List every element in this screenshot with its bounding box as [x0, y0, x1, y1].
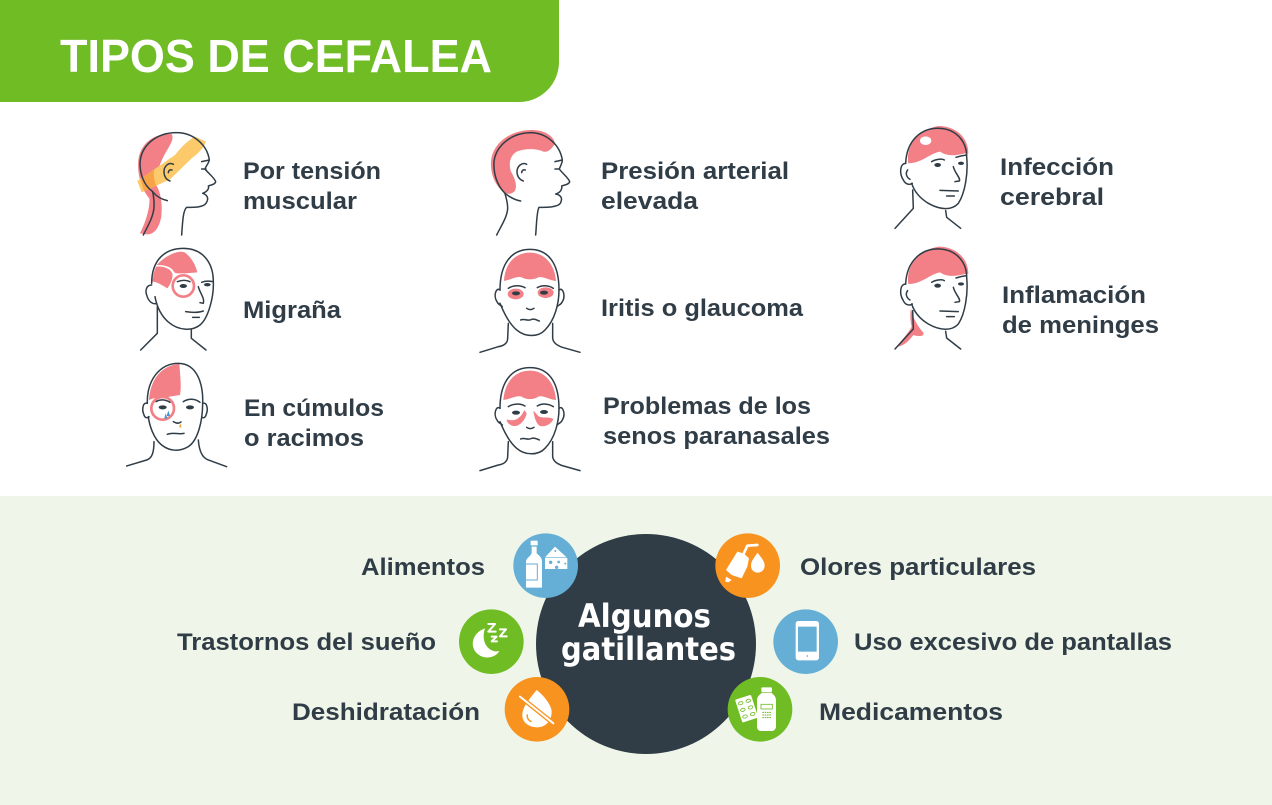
item: migraña — [141, 248, 342, 350]
central heading: Algunos — [578, 597, 711, 635]
label: senos paranasales — [603, 423, 830, 450]
icon: smartphone — [773, 609, 838, 674]
label: Inflamación — [1002, 282, 1146, 309]
icon: face with migraine area and eye ring — [141, 248, 213, 350]
label — [244, 395, 384, 452]
item: presión arterial elevada — [491, 130, 789, 235]
label: o racimos — [244, 425, 364, 452]
label: Migraña — [243, 297, 342, 324]
label: Problemas de los — [603, 393, 811, 420]
label: Por tensión — [243, 158, 381, 185]
icon: food and drink — [513, 533, 578, 598]
label: trastornos del sueño: Trastornos del sueño — [177, 629, 436, 656]
icon: face with eye pain — [480, 249, 580, 352]
label: olores particulares: Olores particulares — [800, 554, 1036, 581]
label — [243, 158, 381, 215]
panel: tipos de cefalea — [127, 126, 1159, 471]
label — [1002, 282, 1159, 339]
icon: face with cluster pain — [127, 363, 227, 467]
central heading — [561, 597, 736, 668]
label: deshidratación: Deshidratación — [292, 699, 480, 726]
label — [603, 393, 830, 450]
icon: head profile with crown pain — [491, 130, 570, 235]
label — [1000, 154, 1114, 211]
icon: face with spot on head — [895, 126, 968, 228]
label: En cúmulos — [244, 395, 384, 422]
icon: head profile with tension band — [137, 133, 216, 235]
panel: algunos gatillantes — [0, 496, 1272, 805]
icon: face with sinus pain — [480, 368, 580, 471]
item: infección cerebral — [895, 126, 1114, 228]
icon: medicine bottle and blister — [728, 677, 792, 742]
title: TIPOS DE CEFALEA — [60, 30, 492, 82]
label: uso excesivo de pantallas: Uso excesivo de pantallas — [854, 629, 1172, 656]
label: muscular — [243, 188, 357, 215]
label — [601, 158, 789, 215]
label: Infección — [1000, 154, 1114, 181]
item: problemas de los senos paranasales — [480, 368, 830, 471]
label: Iritis o glaucoma — [601, 295, 804, 322]
label: Presión arterial — [601, 158, 789, 185]
item: en cúmulos o racimos — [127, 363, 384, 467]
item: por tensión muscular — [137, 133, 381, 235]
central circle — [536, 534, 756, 754]
label: cerebral — [1000, 184, 1104, 211]
item: inflamación de meninges — [895, 247, 1159, 349]
icon: face with neck pain — [895, 247, 968, 349]
central heading: gatillantes — [561, 630, 736, 668]
header banner — [0, 0, 559, 102]
label: de meninges — [1002, 312, 1159, 339]
label: elevada — [601, 188, 699, 215]
icon: fuel nozzle and drop — [715, 533, 780, 598]
icon: moon and zzz — [459, 609, 524, 674]
icon: no water drop — [505, 677, 569, 742]
label: alimentos: Alimentos — [361, 554, 485, 581]
item: iritis o glaucoma — [480, 249, 804, 352]
label: medicamentos: Medicamentos — [819, 699, 1003, 726]
